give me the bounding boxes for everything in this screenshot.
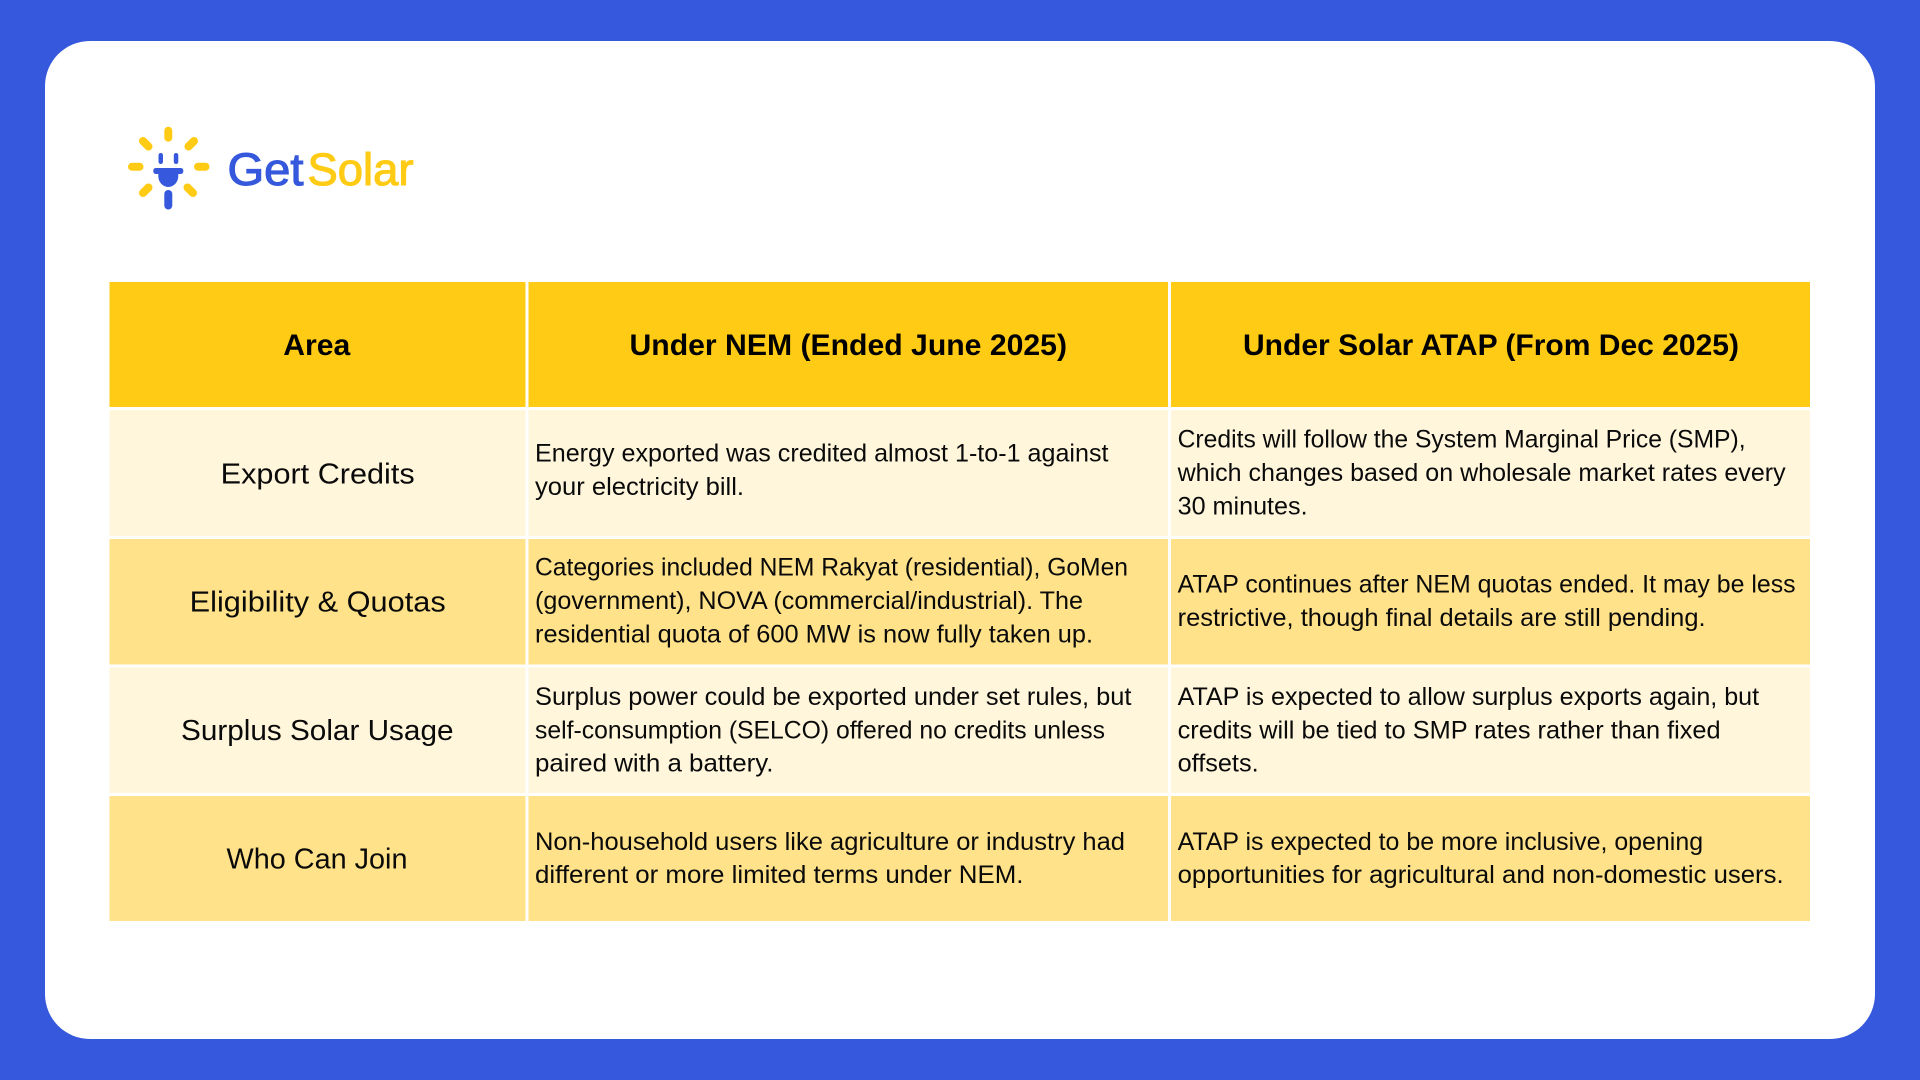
text block: NEM surplus usage [535, 683, 1132, 778]
text block: ATAP surplus usage [1178, 683, 1759, 778]
text block: NEM surplus usage: Surplus power could be exported under set rules, but [535, 683, 1132, 711]
row label: Who Can Join: Who Can Join [226, 843, 408, 875]
text block: NEM eligibility: (government), NOVA (commercial/industrial). The [535, 587, 1083, 615]
text block: ATAP surplus usage: offsets. [1178, 750, 1259, 778]
text block: NEM eligibility [535, 554, 1128, 649]
text block: ATAP eligibility [1178, 571, 1796, 632]
text block: NEM who can join: Non-household users like agriculture or industry had [535, 828, 1125, 856]
logo wordmark: Get: Get [228, 144, 304, 195]
text block: ATAP surplus usage: ATAP is expected to allow surplus exports again, but [1178, 683, 1759, 711]
text block: NEM who can join: different or more limited terms under NEM. [535, 861, 1024, 889]
text block: ATAP export credits [1177, 426, 1786, 520]
row label: Export Credits: Export Credits [221, 458, 415, 490]
text block: ATAP eligibility: restrictive, though final details are still pending. [1178, 604, 1706, 632]
row: Who Can Join [110, 796, 1810, 921]
table header row [110, 282, 1810, 407]
logo wordmark: Solar: Solar [308, 144, 414, 195]
text block: NEM eligibility: Categories included NEM Rakyat (residential), GoMen [535, 554, 1128, 582]
heading: Area: Area [283, 329, 351, 362]
text block: NEM eligibility: residential quota of 600 MW is now fully taken up. [535, 621, 1093, 649]
row label: Eligibility & Quotas: Eligibility & Quotas [190, 587, 446, 619]
text block: ATAP who can join: opportunities for agricultural and non-domestic users. [1178, 861, 1784, 889]
text block: ATAP export credits: which changes based on wholesale market rates every [1177, 459, 1786, 487]
text block: ATAP surplus usage: credits will be tied to SMP rates rather than fixed [1178, 716, 1721, 744]
row: Eligibility & Quotas [110, 539, 1810, 664]
text block: NEM surplus usage: paired with a battery. [535, 750, 774, 778]
text block: ATAP who can join [1178, 828, 1784, 889]
row: Export Credits [110, 410, 1810, 536]
row: Surplus Solar Usage [110, 668, 1810, 793]
row label: Surplus Solar Usage: Surplus Solar Usage [181, 715, 454, 747]
text block: NEM export credits [535, 440, 1109, 501]
text block: NEM export credits: Energy exported was credited almost 1-to-1 against [535, 440, 1109, 468]
logo: GetSolar [132, 131, 414, 210]
text block: NEM export credits: your electricity bill. [535, 473, 744, 501]
text block: NEM surplus usage: self-consumption (SELCO) offered no credits unless [535, 716, 1105, 744]
heading: Under Solar ATAP: Under Solar ATAP (From Dec 2025) [1243, 329, 1739, 362]
text block: ATAP export credits: Credits will follow the System Marginal Price (SMP), [1178, 426, 1746, 454]
text block: ATAP who can join: ATAP is expected to be more inclusive, opening [1178, 828, 1703, 856]
icon: sun plug [132, 131, 206, 210]
heading: Under NEM: Under NEM (Ended June 2025) [630, 329, 1067, 362]
text block: ATAP eligibility: ATAP continues after NEM quotas ended. It may be less [1178, 571, 1796, 599]
text block: NEM who can join [535, 828, 1125, 889]
comparison table [110, 282, 1810, 921]
text block: ATAP export credits: 30 minutes. [1178, 492, 1308, 520]
